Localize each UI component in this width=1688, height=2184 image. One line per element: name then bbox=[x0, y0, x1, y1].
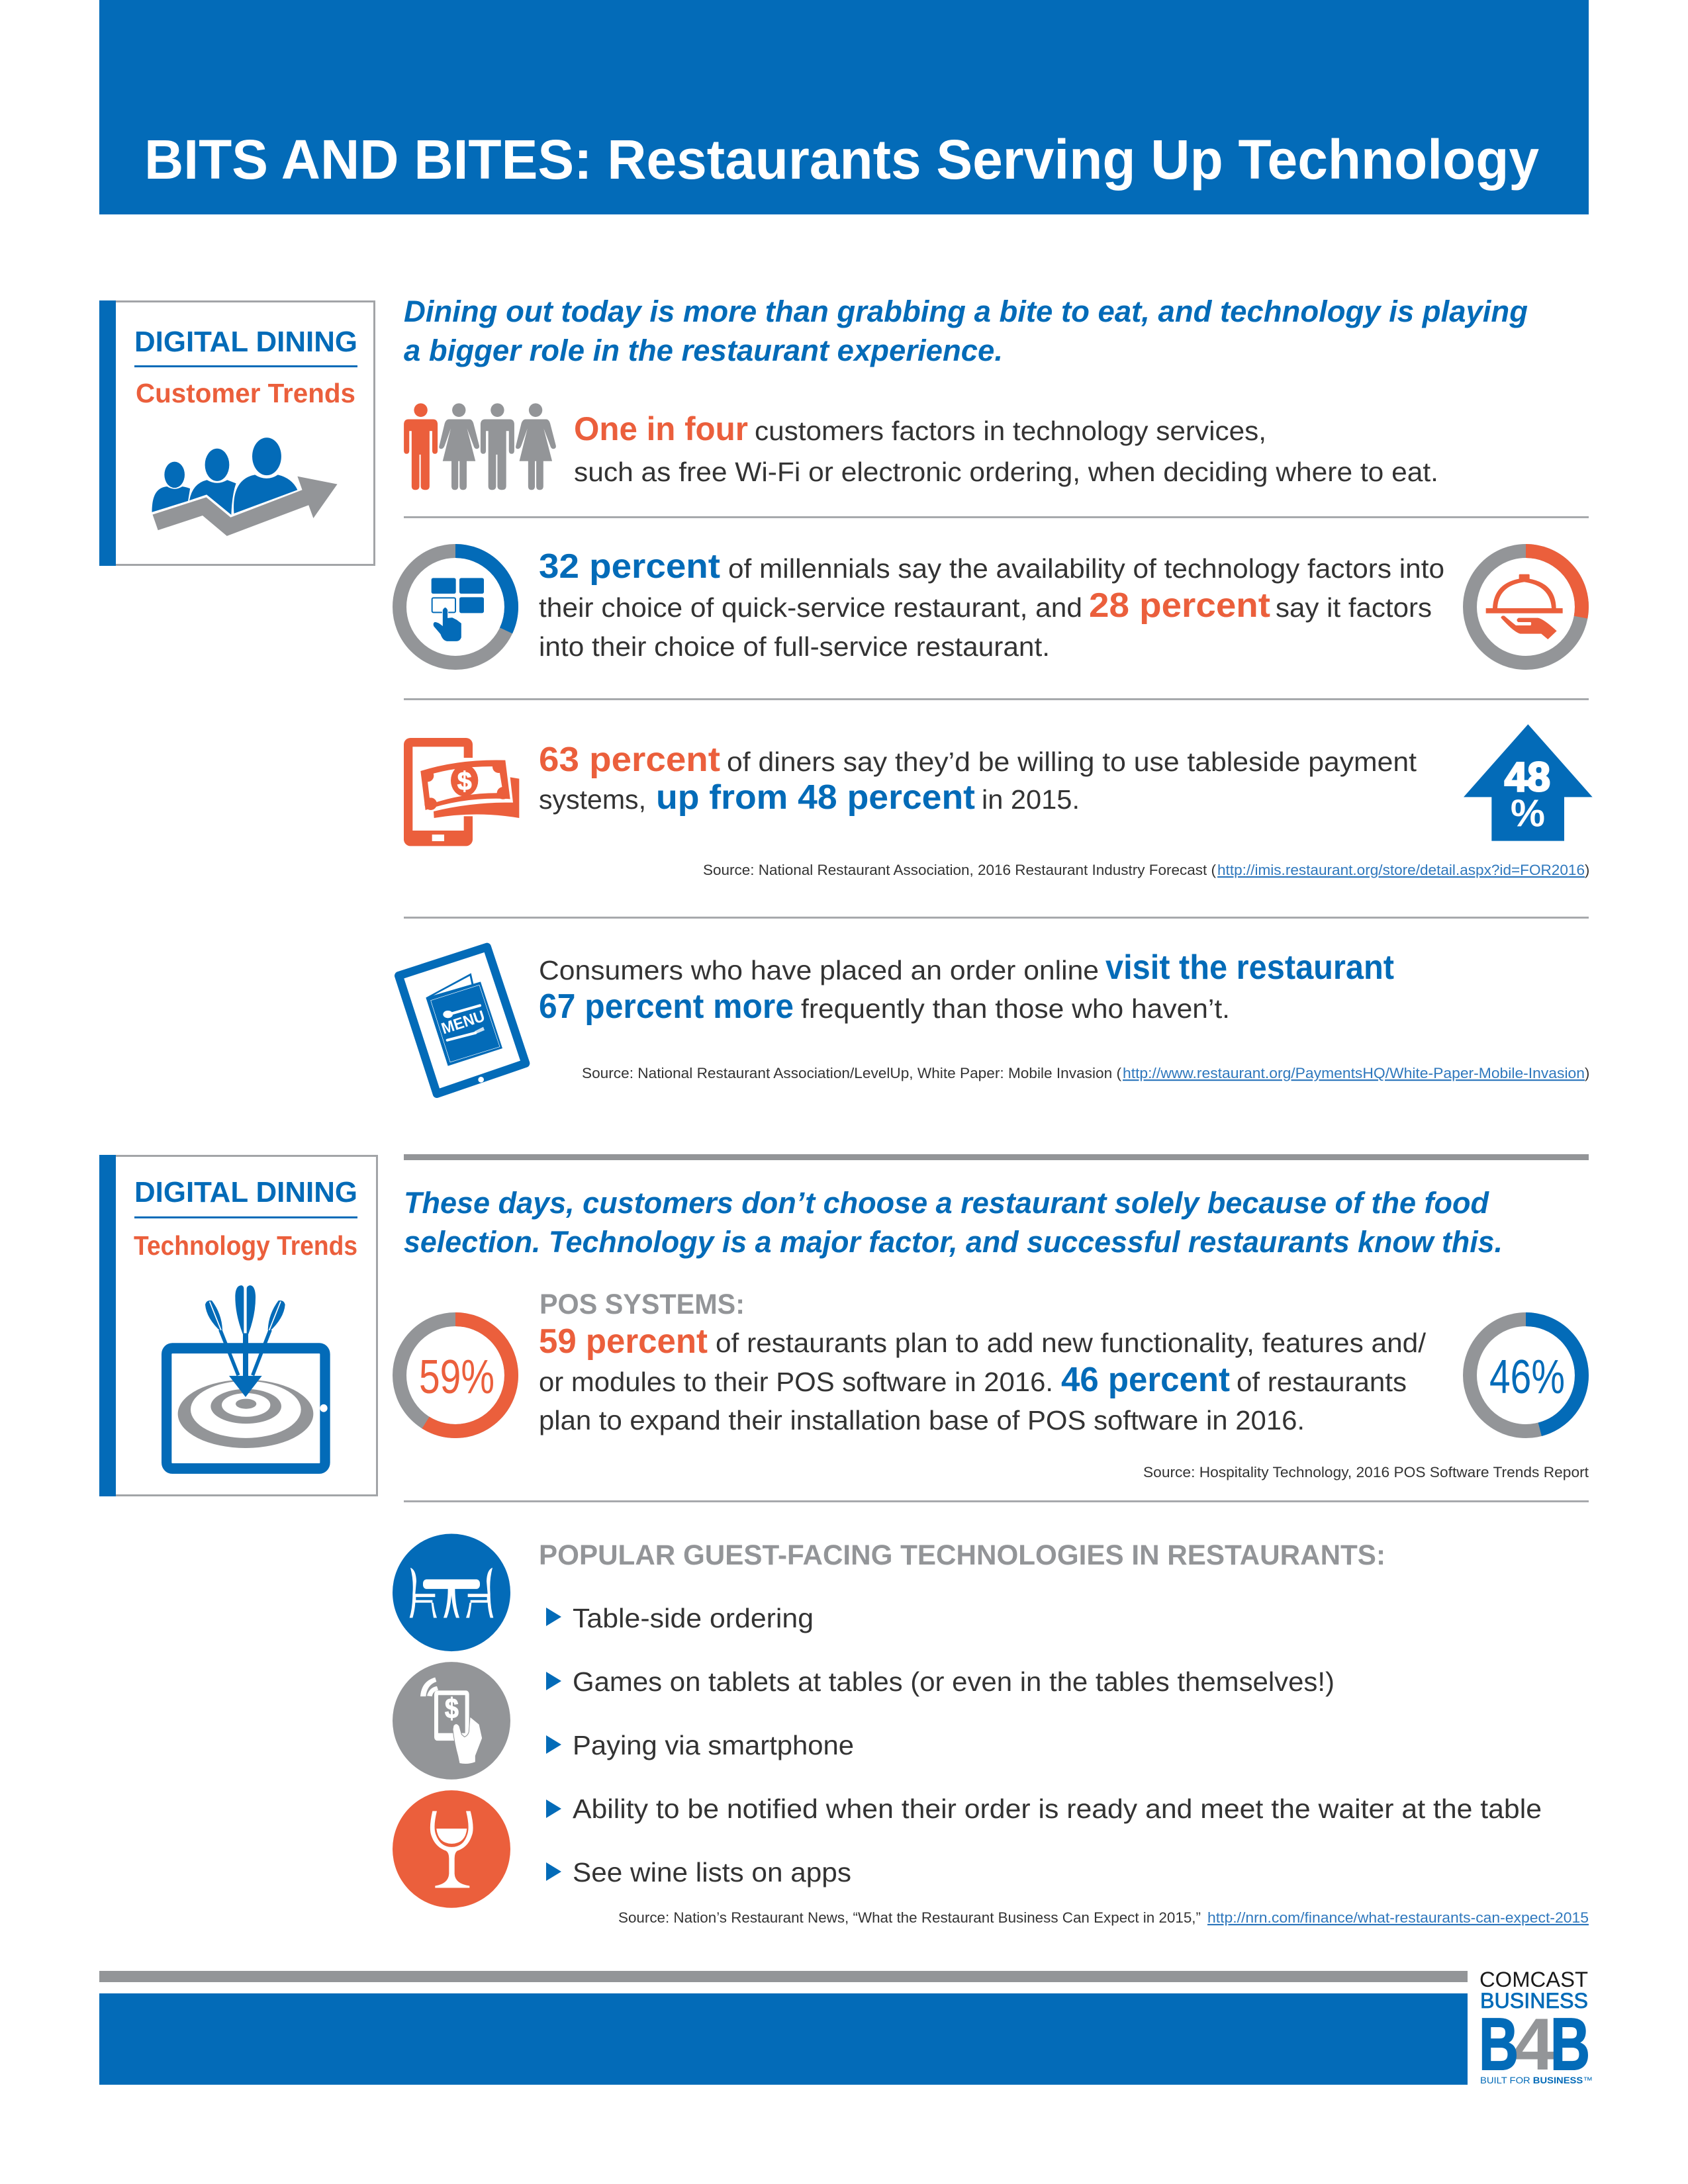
text: one in four: customers factors in technology services, bbox=[755, 416, 1266, 446]
list: guest-facing technologies: See wine lists on apps bbox=[573, 1857, 851, 1888]
chart: 46 percent donut: 46% bbox=[1489, 1351, 1565, 1404]
logo: comcast business b4b: B bbox=[1479, 2003, 1519, 2085]
intro text: technology trends bbox=[404, 1186, 1503, 1259]
chart: 46 percent donut bbox=[1470, 1320, 1582, 1431]
text: pos systems: plan to expand their installation base of POS software in 2016. bbox=[539, 1405, 1305, 1435]
text: pos systems: of restaurants bbox=[1237, 1367, 1407, 1397]
intro text: customer trends bbox=[404, 295, 1528, 367]
footer band bbox=[99, 1971, 1468, 2085]
source: mobile invasion white paper: ) bbox=[1585, 1065, 1589, 1081]
icon: phone with money: $ bbox=[457, 766, 472, 796]
text: pos systems: 59 percent bbox=[539, 1322, 708, 1361]
source: hospitality technology: Source: Hospitality Technology, 2016 POS Software Trends Report bbox=[1143, 1464, 1589, 1480]
chart: 28 percent donut with serving cloche icon bbox=[1470, 551, 1582, 663]
text: 63 percent: in 2015. bbox=[982, 784, 1080, 815]
source: national restaurant association forecast: Source: National Restaurant Association, 2016 Restaurant Industry Forecast ( bbox=[703, 862, 1217, 878]
text: 32 and 28 percent: of millennials say the availability of technology factors into bbox=[728, 553, 1444, 584]
text: 32 and 28 percent: say it factors bbox=[1276, 592, 1432, 623]
text: 32 and 28 percent: into their choice of full-service restaurant. bbox=[539, 631, 1050, 662]
source: nation's restaurant news: Source: Nation’s Restaurant News, “What the Restaurant Business Can Expect in 2015,” bbox=[618, 1909, 1201, 1926]
text: one in four bbox=[574, 410, 1438, 487]
text: 63 percent: 63 percent bbox=[539, 741, 720, 779]
list: guest-facing technologies: Table-side ordering bbox=[573, 1603, 814, 1633]
list: guest-facing technologies: Games on tablets at tables (or even in the tables themselves!) bbox=[573, 1666, 1335, 1697]
icon: people on rising arrow bbox=[152, 437, 338, 536]
text: 63 percent: systems, bbox=[539, 784, 646, 815]
text: online orders bbox=[539, 948, 1394, 1026]
logo: comcast business b4b: BUILT FOR BUSINESS ™ bbox=[1480, 2075, 1593, 2085]
icon: up arrow 48 percent: % bbox=[1511, 792, 1545, 835]
intro text: customer trends: Dining out today is more than grabbing a bite to eat, and technology is playing bbox=[404, 295, 1528, 328]
source: nation's restaurant news bbox=[618, 1909, 1589, 1926]
icon: touch menu bbox=[432, 578, 484, 641]
icon: table and chairs bbox=[393, 1534, 510, 1651]
logo: comcast business b4b: BUSINESS bbox=[1480, 1989, 1588, 2013]
icon: phone with money bbox=[404, 738, 519, 846]
icon: tablet with target and darts bbox=[167, 1285, 328, 1469]
icon: wine glass bbox=[393, 1790, 510, 1908]
text: online orders: Consumers who have placed an order online bbox=[539, 955, 1099, 985]
logo: comcast business b4b: 4 bbox=[1513, 2003, 1555, 2085]
text: pos systems: or modules to their POS software in 2016. bbox=[539, 1367, 1053, 1397]
source: national restaurant association forecast: ) bbox=[1585, 862, 1589, 878]
intro text: technology trends: selection. Technology is a major factor, and successful restaurants know this. bbox=[404, 1225, 1503, 1259]
list: guest-facing technologies: Paying via smartphone bbox=[573, 1730, 854, 1760]
icon: up arrow 48 percent: 48 bbox=[1505, 754, 1550, 800]
text: 63 percent: up from 48 percent bbox=[656, 778, 975, 817]
icon: one in four people bbox=[404, 403, 556, 490]
icon: tablet with menu bbox=[399, 947, 526, 1094]
source: mobile invasion white paper: http://www.restaurant.org/PaymentsHQ/White-Paper-Mobile-Invasion bbox=[1123, 1065, 1585, 1081]
text: pos systems: POS SYSTEMS: bbox=[539, 1289, 745, 1320]
logo: comcast business b4b: B bbox=[1550, 2003, 1590, 2085]
list: guest-facing technologies: Ability to be notified when their order is ready and meet the waiter at the table bbox=[573, 1794, 1542, 1824]
text: online orders: frequently than those who haven’t. bbox=[801, 993, 1230, 1024]
subheading: customer trends: Customer Trends bbox=[136, 378, 355, 408]
text: pos systems: 46 percent bbox=[1061, 1361, 1230, 1399]
panel: technology trends label bbox=[99, 1155, 377, 1496]
subheading: technology trends: Technology Trends bbox=[134, 1230, 357, 1261]
source: national restaurant association forecast bbox=[703, 862, 1589, 878]
text: online orders: 67 percent more bbox=[539, 987, 794, 1026]
list: guest-facing technologies bbox=[546, 1603, 1542, 1888]
icon: tablet with menu: MENU bbox=[440, 1007, 487, 1038]
header banner bbox=[99, 0, 1589, 214]
text: pos systems: of restaurants plan to add new functionality, features and/ bbox=[716, 1328, 1427, 1358]
chart: 59 percent donut bbox=[400, 1320, 511, 1431]
source: mobile invasion white paper: Source: National Restaurant Association/LevelUp, White Paper: Mobile Invasion ( bbox=[582, 1065, 1122, 1081]
source: nation's restaurant news: http://nrn.com/finance/what-restaurants-can-expect-2015 bbox=[1207, 1909, 1589, 1926]
logo: comcast business b4b: COMCAST bbox=[1479, 1968, 1588, 1991]
intro text: customer trends: a bigger role in the restaurant experience. bbox=[404, 334, 1003, 367]
chart: 59 percent donut: 59% bbox=[419, 1351, 494, 1404]
icon: smartphone payment: $ bbox=[445, 1693, 459, 1725]
icon: up arrow 48 percent bbox=[1464, 724, 1593, 841]
text: pos systems bbox=[539, 1289, 1427, 1435]
source: mobile invasion white paper bbox=[582, 1065, 1589, 1081]
text: online orders: visit the restaurant bbox=[1105, 948, 1394, 987]
icon: smartphone payment bbox=[393, 1662, 510, 1780]
heading: digital dining: DIGITAL DINING bbox=[134, 1176, 357, 1208]
intro text: technology trends: These days, customers don’t choose a restaurant solely because of the food bbox=[404, 1186, 1490, 1220]
text: 63 percent bbox=[539, 741, 1417, 817]
text: 32 and 28 percent: their choice of quick-service restaurant, and bbox=[539, 592, 1082, 623]
text: 32 and 28 percent: 28 percent bbox=[1089, 586, 1270, 625]
heading: popular guest-facing technologies: POPULAR GUEST-FACING TECHNOLOGIES IN RESTAURANTS: bbox=[539, 1539, 1385, 1571]
title: BITS AND BITES: Restaurants Serving Up Technology bbox=[144, 128, 1539, 191]
text: one in four: One in four bbox=[574, 410, 748, 447]
heading: digital dining: DIGITAL DINING bbox=[134, 326, 357, 358]
chart: 32 percent donut with touch menu icon bbox=[400, 551, 511, 663]
icon: serving cloche bbox=[1486, 574, 1563, 639]
text: one in four: such as free Wi-Fi or electronic ordering, when deciding where to eat. bbox=[574, 457, 1438, 487]
logo: comcast business b4b bbox=[1479, 1968, 1593, 2085]
text: 32 and 28 percent: 32 percent bbox=[539, 547, 720, 586]
text: 32 and 28 percent bbox=[539, 547, 1444, 662]
source: national restaurant association forecast: http://imis.restaurant.org/store/detail.aspx?id=FOR2016 bbox=[1217, 862, 1585, 878]
text: 63 percent: of diners say they’d be willing to use tableside payment bbox=[727, 747, 1417, 777]
panel: customer trends label bbox=[99, 300, 375, 566]
